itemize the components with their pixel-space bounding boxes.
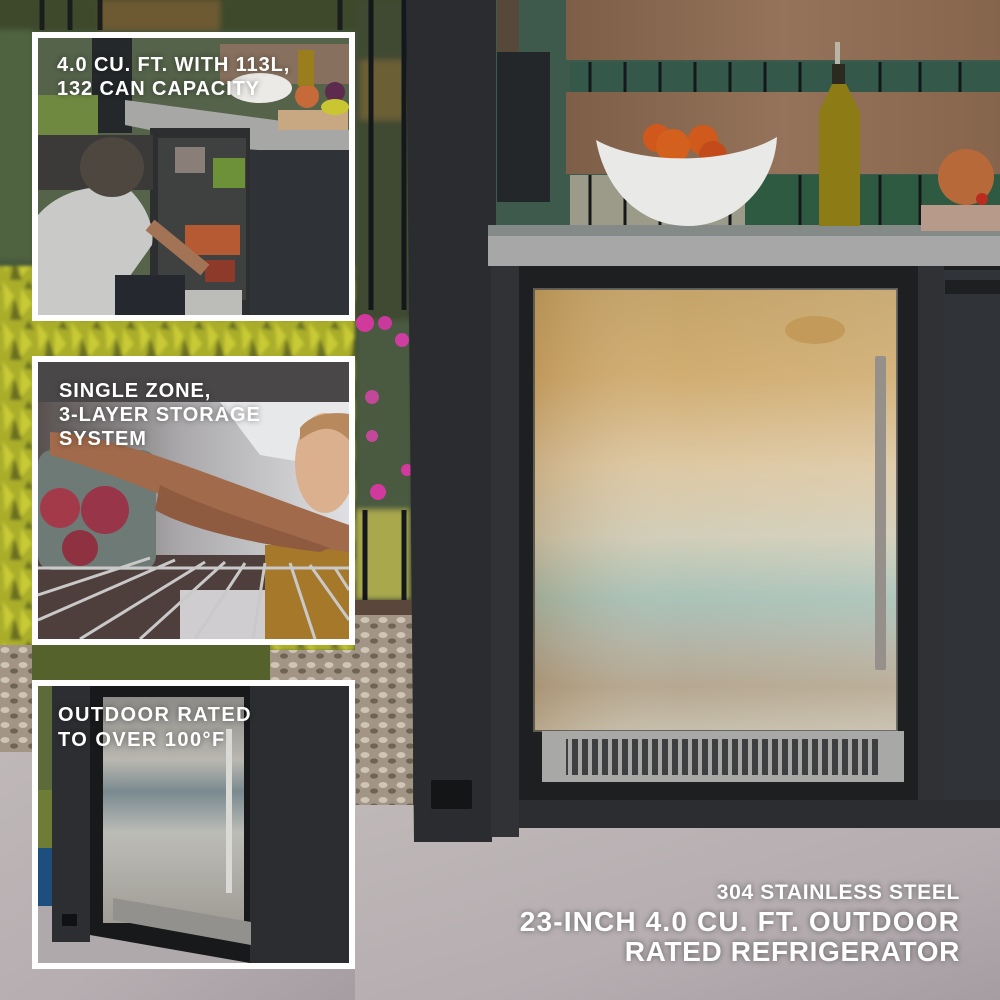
refrigerator	[534, 289, 904, 782]
inset 3 caption: OUTDOOR RATED	[58, 704, 252, 726]
bowl of tomatoes	[596, 124, 777, 226]
inset 3 caption	[58, 704, 252, 751]
right background: fence, hedge and wood panels	[495, 0, 1000, 240]
gravel and pavement	[0, 615, 1000, 1000]
inset 1 caption: 132 CAN CAPACITY	[57, 78, 260, 100]
post and cabinet frame	[406, 0, 1000, 842]
main caption: 304 STAINLESS STEEL	[717, 881, 960, 904]
oil bottle	[819, 42, 860, 226]
main caption: 23-INCH 4.0 CU. FT. OUTDOOR	[520, 906, 960, 937]
main caption: RATED REFRIGERATOR	[625, 936, 960, 967]
inset 2: reaching into fridge	[32, 356, 355, 645]
inset 1 caption	[56, 54, 290, 100]
main caption	[518, 881, 961, 967]
inset 2 caption	[58, 380, 261, 450]
inset 1 caption: 4.0 CU. FT. WITH 113L,	[57, 54, 290, 76]
inset 3 caption: TO OVER 100°F	[58, 729, 226, 751]
countertop	[488, 235, 1000, 266]
inset 2 caption: 3-LAYER STORAGE	[59, 404, 261, 426]
background foliage	[0, 0, 420, 1000]
inset 3: refrigerator in cabinet	[32, 680, 355, 969]
inset 1: woman at fridge	[32, 32, 355, 321]
inset 2 caption: SYSTEM	[59, 428, 147, 450]
onion and tray	[921, 149, 1000, 231]
inset 2 caption: SINGLE ZONE,	[59, 380, 211, 402]
